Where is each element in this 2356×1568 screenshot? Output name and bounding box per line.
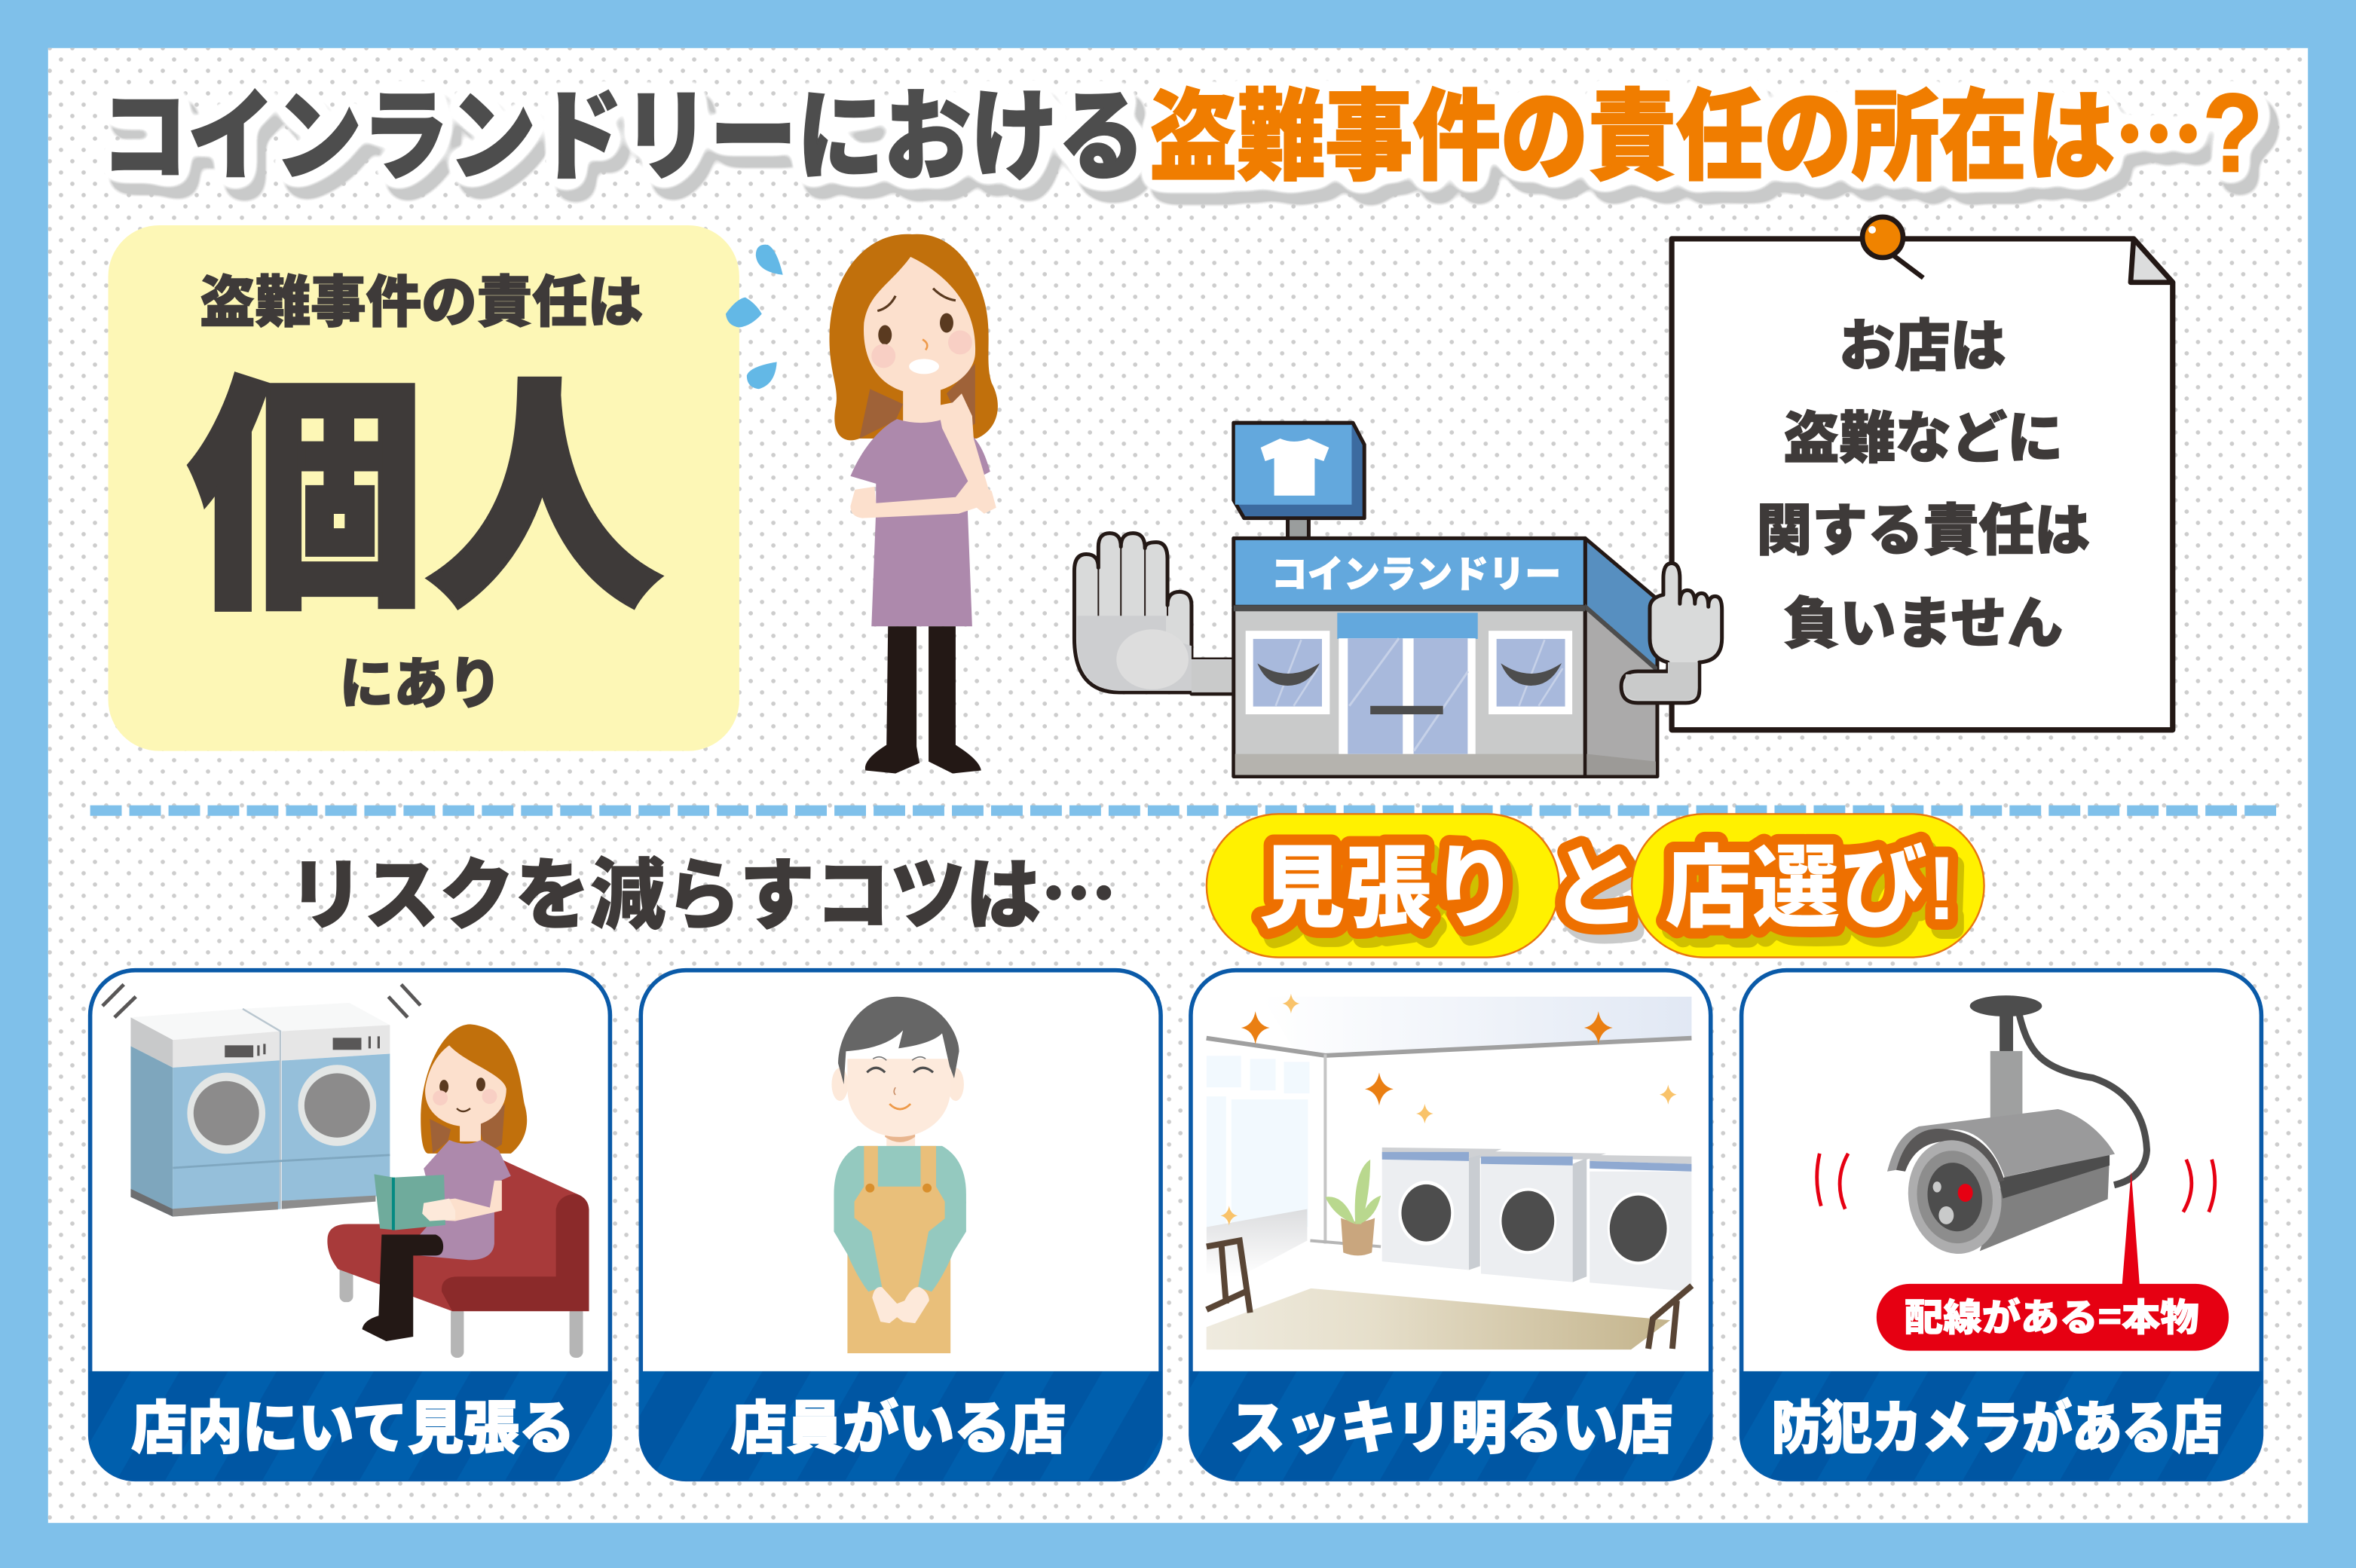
panel: watch in the store bbox=[89, 970, 611, 1480]
washers bbox=[1382, 1148, 1691, 1291]
panel: bright and tidy store bbox=[1190, 970, 1712, 1480]
section heading: tips: リスクを減らすコツは… bbox=[289, 832, 1116, 945]
roof with shop name bbox=[1234, 538, 1657, 673]
callout: wiring means real: 配線がある =本物 bbox=[1905, 1288, 2199, 1342]
note text: 関する責任は bbox=[1757, 500, 2090, 562]
woman bbox=[362, 1024, 527, 1341]
icon: pin bbox=[1862, 217, 1923, 278]
plant bbox=[1325, 1160, 1381, 1255]
sofa bbox=[327, 1154, 589, 1358]
title: dark part: コインランドリーにおける bbox=[101, 81, 1145, 192]
panel: staffed store bbox=[640, 970, 1161, 1480]
illustration: washers bbox=[130, 1003, 390, 1217]
sign pole bbox=[1288, 508, 1308, 539]
note text bbox=[1757, 314, 2090, 655]
caption bar bbox=[1740, 1371, 2262, 1480]
title: orange part: 盗難事件の責任の所在は…? bbox=[1149, 56, 2263, 200]
left hand bbox=[1074, 533, 1234, 694]
building walls bbox=[1234, 608, 1585, 777]
icon: sweat drops bbox=[726, 245, 783, 389]
note text: 盗難などに bbox=[1783, 407, 2063, 469]
motion lines bbox=[103, 985, 421, 1017]
caption: 店員がいる店 bbox=[731, 1397, 1066, 1461]
title bbox=[101, 56, 2263, 200]
chairs bbox=[1207, 1240, 1250, 1313]
callout: wiring means real bbox=[1877, 1172, 2229, 1351]
caption: 店内にいて見張る bbox=[131, 1397, 575, 1461]
panel footer text: にあり bbox=[340, 653, 502, 715]
illustration: security camera bbox=[1887, 995, 2146, 1261]
text: store choice: 店選び! bbox=[1665, 839, 1957, 939]
caption bar bbox=[89, 1371, 611, 1480]
windows with eyes bbox=[1246, 631, 1572, 714]
door bbox=[1337, 613, 1478, 754]
pill: store choice bbox=[1632, 814, 1984, 958]
sparkles bbox=[1241, 1011, 1613, 1105]
text: watching: 見張り bbox=[1259, 839, 1518, 939]
divider bbox=[90, 808, 2278, 813]
signal waves bbox=[1817, 1154, 2215, 1212]
note: the shop bears no responsibility bbox=[1672, 217, 2173, 730]
illustration: clean laundromat room bbox=[1207, 994, 1692, 1349]
shop sign with T-shirt bbox=[1234, 423, 1364, 518]
panel: store with security camera bbox=[1740, 970, 2262, 1480]
panel: responsibility lies with the individual bbox=[109, 225, 739, 751]
folded corner bbox=[2131, 239, 2173, 283]
large word: individual: 個人 bbox=[188, 361, 662, 638]
pill: watching bbox=[1207, 814, 1559, 958]
right pointing hand bbox=[1621, 563, 1722, 703]
highlight: watching and store choice bbox=[1207, 814, 1984, 958]
caption bar bbox=[640, 1371, 1161, 1480]
roof with shop name: コインランドリー bbox=[1271, 553, 1561, 595]
illustration: staff member in apron bbox=[831, 997, 966, 1353]
caption bar bbox=[1190, 1371, 1712, 1480]
panel heading: 盗難事件の責任は bbox=[200, 271, 643, 334]
note text: 負いません bbox=[1783, 592, 2063, 655]
illustration: worried woman bbox=[829, 234, 998, 774]
caption: 防犯カメラがある店 bbox=[1771, 1397, 2223, 1461]
caption: スッキリ明るい店 bbox=[1230, 1397, 1673, 1461]
text: and: と bbox=[1550, 839, 1641, 939]
illustration: laundromat building character bbox=[1074, 423, 1722, 777]
note text: お店は bbox=[1839, 314, 2006, 377]
illustration: woman reading on sofa bbox=[327, 1024, 589, 1358]
